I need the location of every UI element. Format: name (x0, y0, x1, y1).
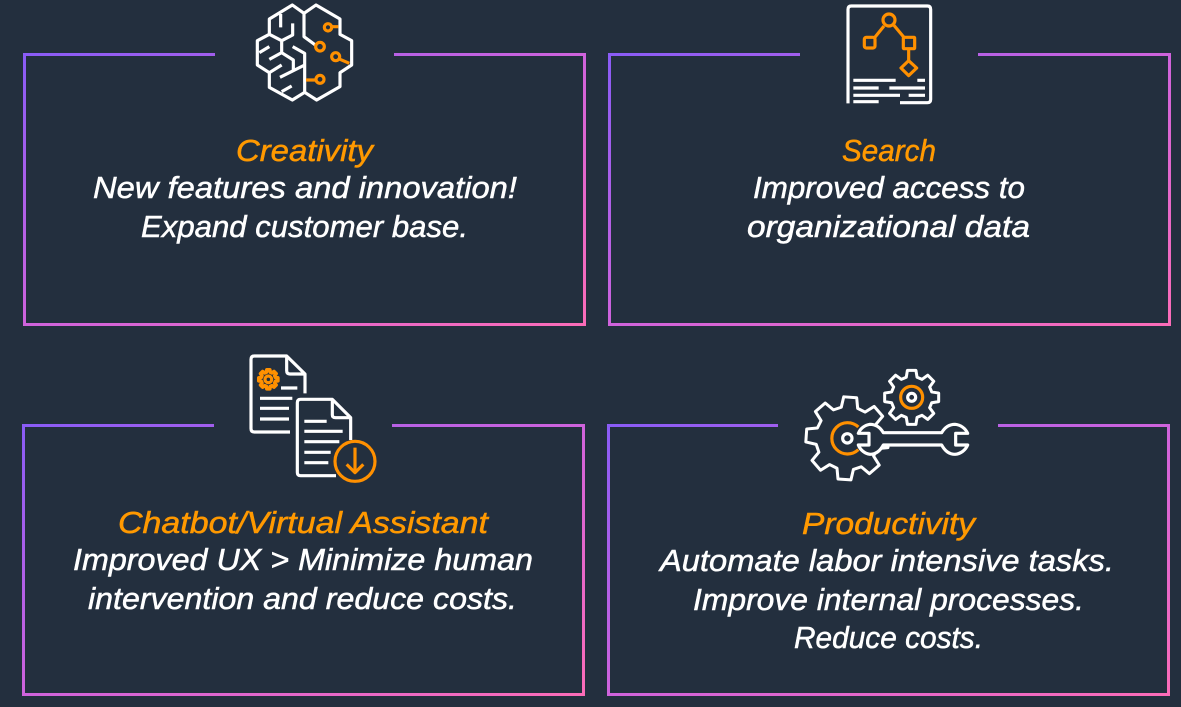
panel: creativity (24, 5, 584, 325)
icon: documents with gear and download (251, 356, 375, 481)
text: search description (747, 170, 1030, 244)
panel border: productivity (608, 426, 1168, 694)
text: search description: organizational data (747, 209, 1030, 244)
icon: brain (257, 5, 352, 100)
text: creativity description (93, 170, 517, 244)
icon: document with flowchart (848, 6, 931, 103)
panel: productivity (608, 370, 1168, 694)
gear hub arc (832, 423, 858, 454)
heading: chatbot: Chatbot/Virtual Assistant (118, 505, 490, 540)
text: productivity description (658, 543, 1114, 655)
text: chatbot description: Improved UX > Minimize human (73, 542, 533, 577)
text: productivity description: Automate labor intensive tasks. (658, 543, 1114, 578)
text: chatbot description (73, 542, 533, 616)
panel: chatbot (24, 356, 584, 694)
panel border: search (610, 54, 1170, 324)
text: chatbot description: intervention and reduce costs. (88, 581, 517, 616)
panel: search (610, 6, 1170, 325)
text: creativity description: New features and innovation! (93, 170, 517, 205)
panel border: chatbot (24, 426, 584, 694)
text: creativity description: Expand customer base. (141, 209, 468, 244)
heading: search: Search (842, 133, 936, 168)
text: productivity description: Reduce costs. (794, 620, 983, 655)
heading: creativity: Creativity (236, 133, 376, 168)
heading: productivity: Productivity (802, 506, 978, 541)
panel border: creativity (24, 54, 584, 324)
text: search description: Improved access to (753, 170, 1025, 205)
icon: gears and wrench (803, 370, 968, 482)
text: productivity description: Improve internal processes. (693, 582, 1084, 617)
